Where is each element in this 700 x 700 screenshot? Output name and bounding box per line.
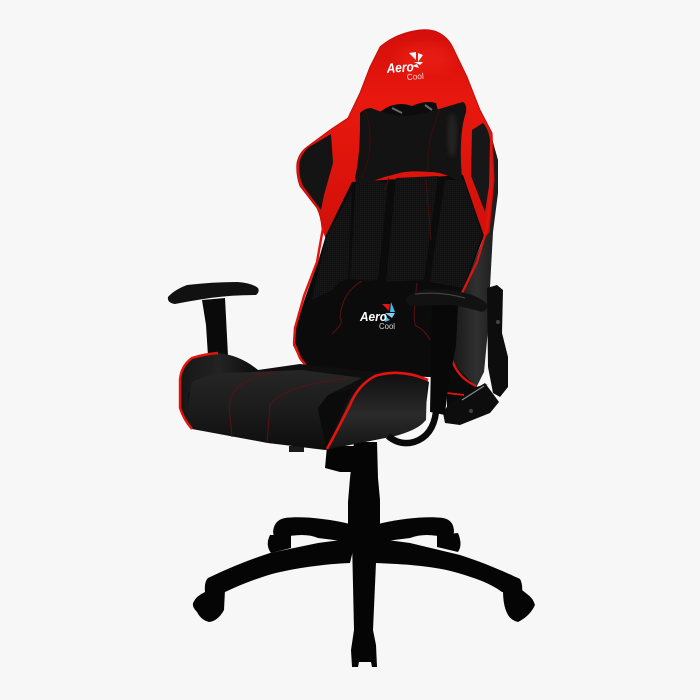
carbon side panels: [350, 178, 482, 288]
front left caster: [193, 590, 225, 622]
seat stitching: [229, 372, 345, 443]
left armrest post: [202, 298, 228, 356]
carbon centre panel: [386, 176, 438, 282]
Cool wordmark: Cool: [379, 321, 395, 331]
inner bolster insert: [318, 389, 352, 447]
carbon side panel: lower left: [312, 190, 352, 300]
dark block beneath backrest: [446, 360, 488, 407]
Aero wordmark: Aero: [359, 309, 387, 324]
left armrest pad: [168, 282, 259, 304]
front right caster: [503, 590, 535, 622]
right bolster: [327, 373, 427, 449]
front right leg: [372, 538, 522, 594]
recline bracket: [443, 285, 508, 425]
under-seat knob: [289, 446, 304, 452]
star base with casters: [193, 442, 535, 667]
lumbar pillow: [332, 279, 452, 356]
Cool wordmark: Cool: [406, 71, 424, 82]
left red trim: [180, 353, 218, 429]
left black wing: [299, 134, 333, 210]
headrest AeroCool logo: [385, 52, 424, 82]
right red trim: [327, 373, 428, 449]
rear left leg and caster: [268, 517, 350, 553]
headrest strap openings: [380, 102, 440, 122]
right armrest pad: [406, 289, 487, 312]
rear right leg and caster: [378, 517, 460, 552]
lumbar AeroCool logo: [359, 302, 395, 331]
right armrest post: [430, 305, 458, 415]
central black backrest panel: [293, 175, 484, 378]
lower right red piping: [452, 360, 476, 386]
lever housing: [325, 446, 355, 472]
seat cushion: [189, 370, 362, 448]
red accent under bracket: [447, 393, 464, 395]
neck pillow: [355, 102, 466, 185]
gas lift column: [348, 442, 380, 545]
fan icon: [382, 302, 395, 322]
right red piping on backrest: [462, 180, 491, 293]
fan icon: [409, 52, 423, 68]
headrest highlight: [397, 44, 453, 72]
right black wing: [471, 123, 490, 212]
gray side of backrest: [450, 135, 498, 388]
seat base body: [180, 353, 429, 450]
left bolster: [180, 353, 258, 429]
seat: [180, 353, 429, 450]
seat mounting tube: [388, 412, 436, 443]
left red piping on backrest: [294, 228, 323, 368]
red backrest shell with headrest: [297, 30, 494, 238]
Aero wordmark: Aero: [385, 59, 414, 76]
front left leg: [205, 538, 356, 592]
backrest centre stitching: [385, 178, 431, 240]
front centre leg: [351, 540, 377, 667]
